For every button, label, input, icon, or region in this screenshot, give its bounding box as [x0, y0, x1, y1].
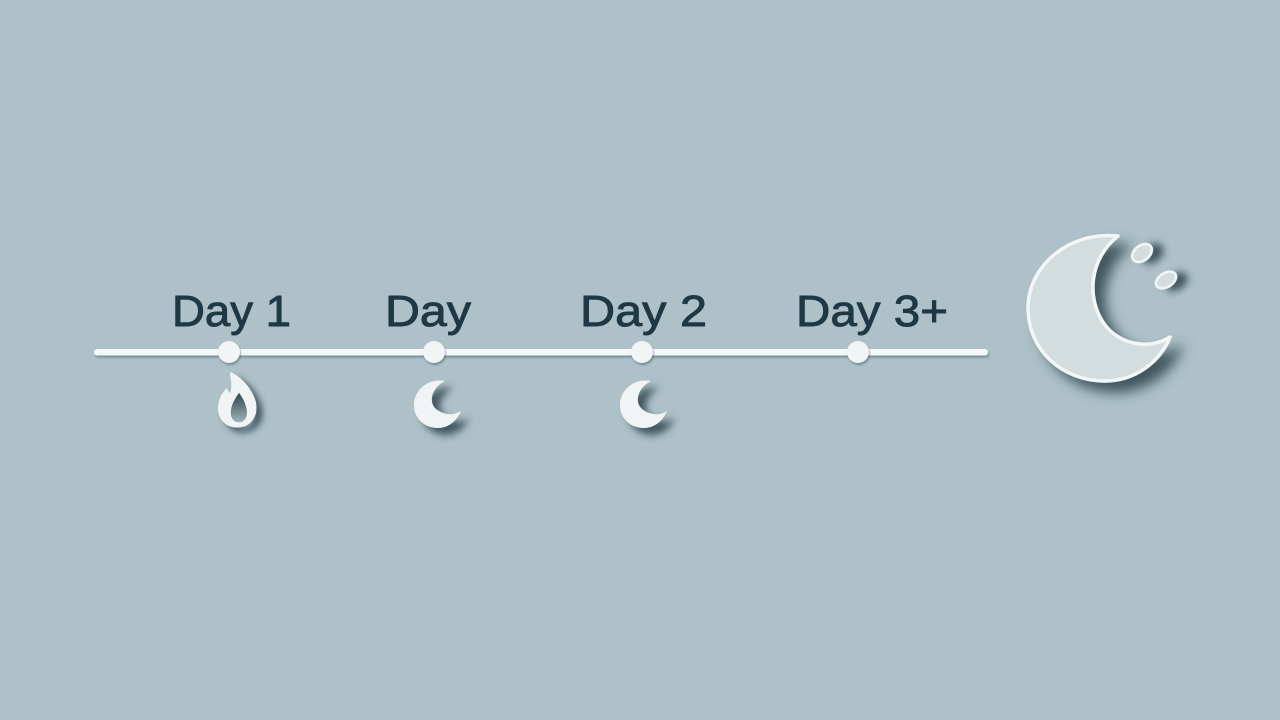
sleep dot upper	[1129, 240, 1155, 266]
label: Day: Day	[385, 287, 471, 336]
icon: large crescent moon with sleep dots	[1028, 236, 1179, 381]
marker: Day 3+	[847, 341, 869, 363]
marker: Day 1	[218, 341, 240, 363]
label: Day 1: Day 1	[172, 287, 291, 336]
marker: Day 2	[631, 341, 653, 363]
timeline axis line	[94, 349, 988, 356]
label: Day 3+: Day 3+	[796, 287, 948, 336]
flame inner shadow	[231, 393, 247, 422]
icon: crescent moon, Day	[414, 381, 461, 428]
sleep dot lower	[1153, 268, 1179, 292]
icon: crescent moon, Day 2	[620, 381, 667, 428]
timeline	[94, 341, 988, 363]
large crescent moon	[1028, 236, 1170, 381]
label: Day 2: Day 2	[580, 287, 707, 336]
icon: flame	[218, 372, 256, 428]
flame body	[218, 372, 256, 428]
marker: Day	[423, 341, 445, 363]
